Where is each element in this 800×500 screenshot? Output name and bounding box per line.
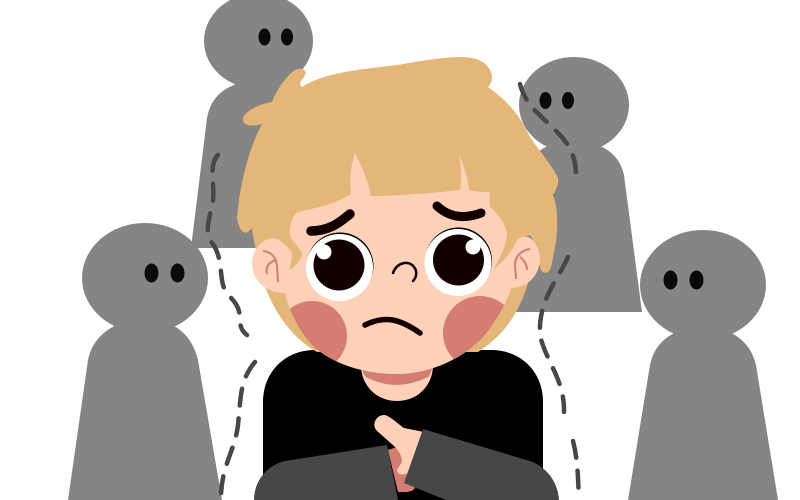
body: black shirt (263, 350, 543, 500)
eyebrow: left (311, 214, 350, 231)
dashed outline: left (208, 155, 255, 495)
eye: left (306, 232, 374, 301)
arm: left sleeve (254, 445, 398, 500)
hand: under (388, 447, 415, 492)
hand: upper (374, 415, 424, 474)
arm: right sleeve (404, 429, 559, 500)
ear: right (495, 237, 540, 288)
eye: right (424, 228, 492, 296)
dashed outline: right (520, 84, 579, 500)
face (283, 140, 515, 374)
figure: back right (505, 57, 642, 312)
ear: left (252, 238, 292, 293)
nose (393, 263, 416, 281)
neck (361, 365, 433, 401)
hair: back layer (255, 240, 536, 352)
figure: back left (191, 0, 320, 248)
figure: front left (68, 223, 222, 500)
figure: front right (628, 230, 778, 500)
cheek: left (290, 301, 347, 362)
cheek: right (443, 296, 504, 359)
eyebrow: right (437, 206, 481, 217)
hair: front (237, 57, 558, 273)
mouth (365, 319, 420, 333)
